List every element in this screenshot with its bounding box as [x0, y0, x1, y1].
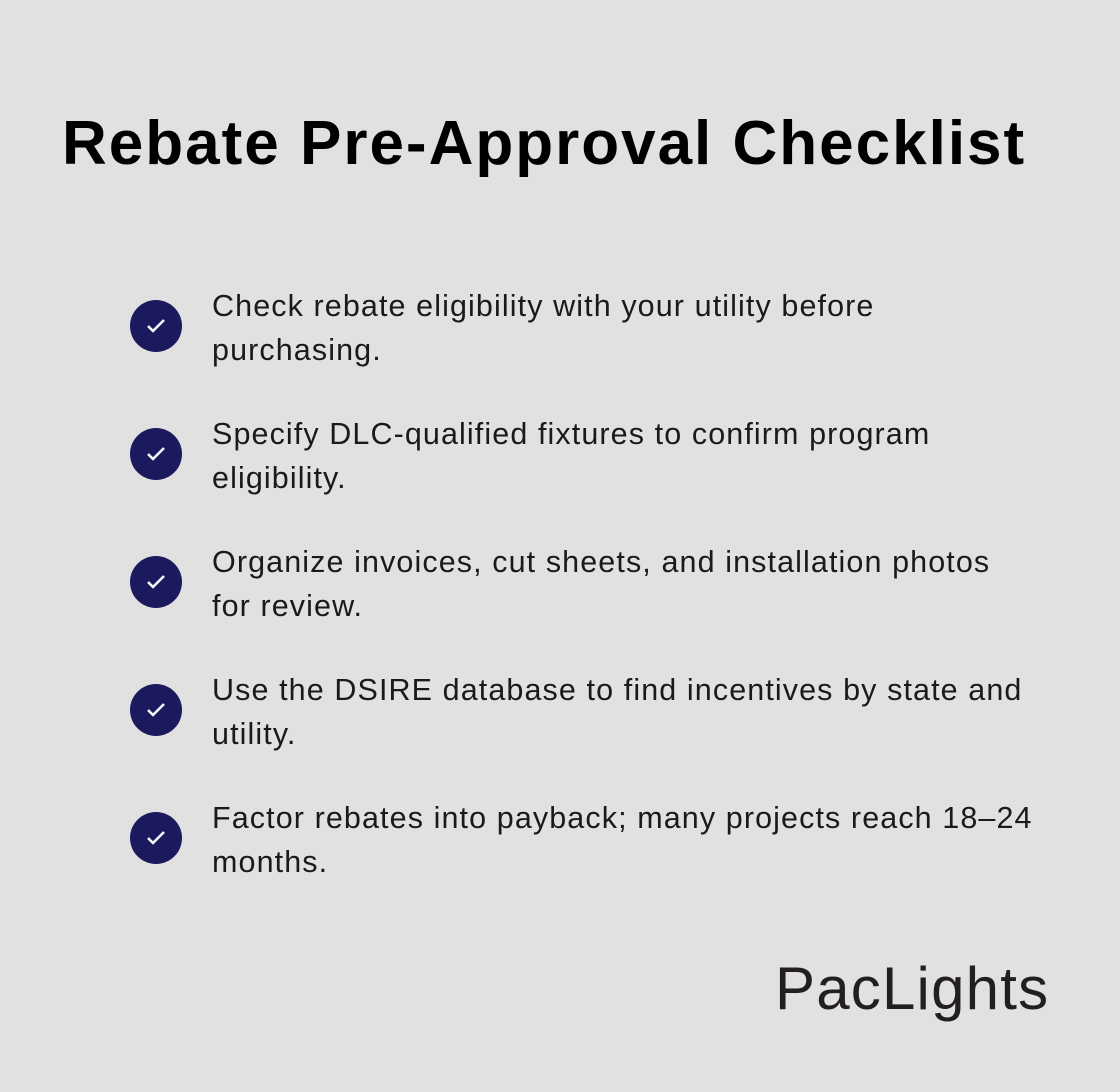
text 4: Use the DSIRE database to find incentives by state and: [212, 673, 1022, 707]
text 1: purchasing.: [212, 333, 382, 367]
text 4: utility.: [212, 717, 296, 751]
icon: check: [130, 684, 182, 736]
text 2: [212, 417, 930, 495]
icon: check: [130, 556, 182, 608]
item 4: [130, 673, 1022, 751]
text 5: [212, 801, 1033, 879]
item 5: [130, 801, 1033, 879]
text 3: Organize invoices, cut sheets, and installation photos: [212, 545, 990, 579]
title: Rebate Pre-Approval Checklist: [62, 109, 1026, 178]
logo: PacLights: [775, 955, 1049, 1022]
text 2: eligibility.: [212, 461, 347, 495]
icon: check: [130, 428, 182, 480]
text 5: Factor rebates into payback; many projects reach 18–24: [212, 801, 1033, 835]
text 2: Specify DLC-qualified fixtures to confirm program: [212, 417, 930, 451]
item 3: [130, 545, 990, 623]
text 4: [212, 673, 1022, 751]
item 2: [130, 417, 930, 495]
item 1: [130, 289, 874, 367]
icon: check: [130, 812, 182, 864]
text 3: [212, 545, 990, 623]
text 1: [212, 289, 874, 367]
icon: check: [130, 300, 182, 352]
text 1: Check rebate eligibility with your utility before: [212, 289, 874, 323]
text 3: for review.: [212, 589, 363, 623]
text 5: months.: [212, 845, 328, 879]
